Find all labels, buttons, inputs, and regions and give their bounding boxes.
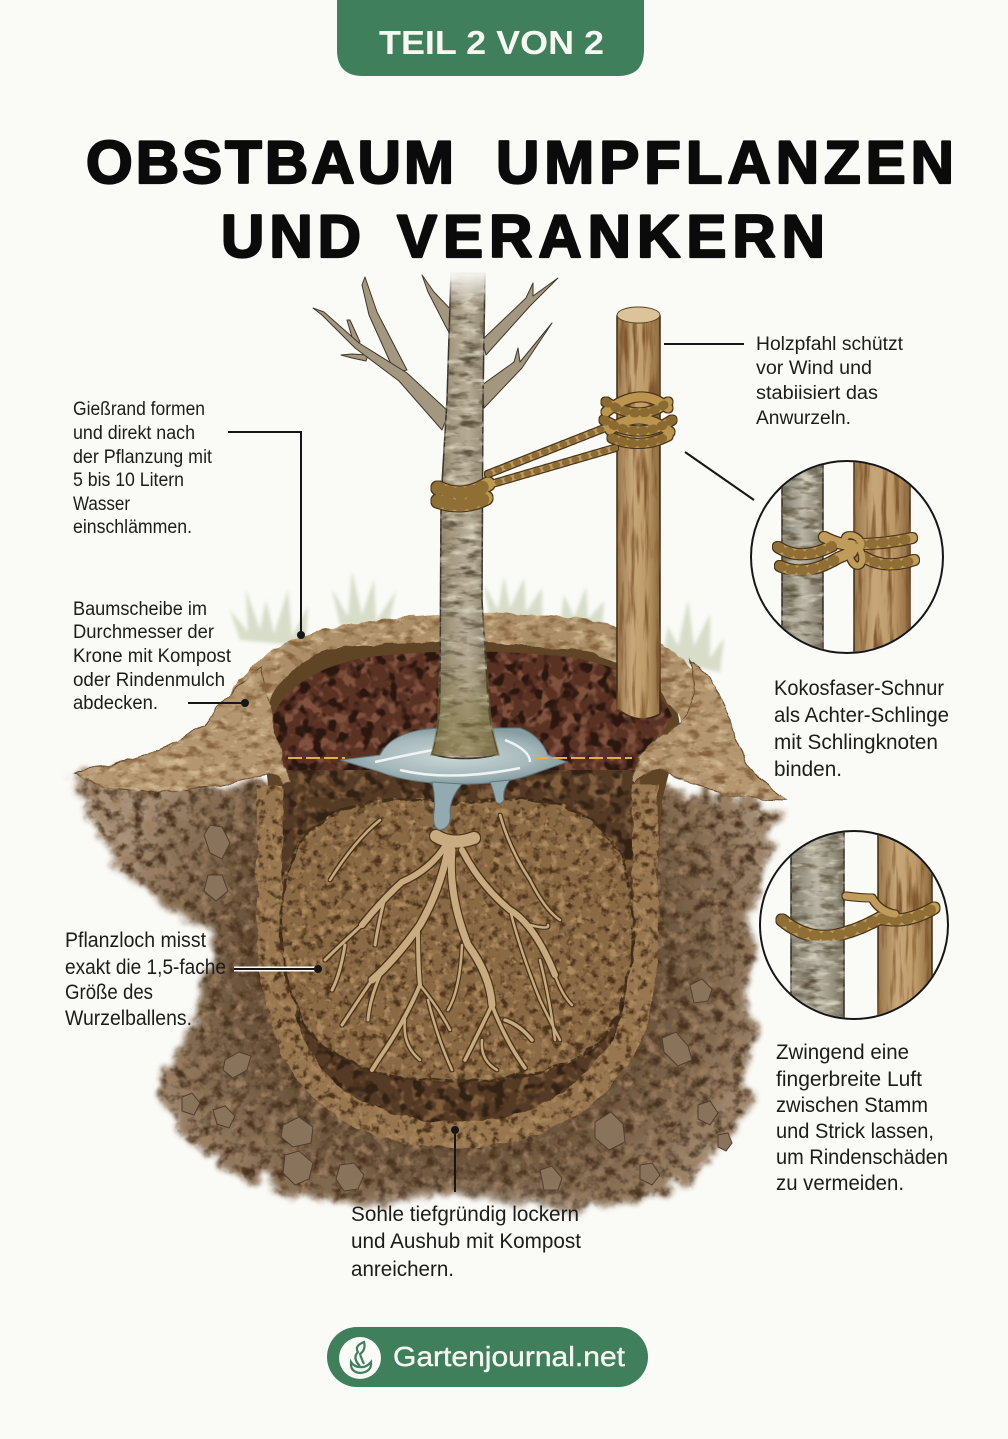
label: pit floor bbox=[351, 1203, 581, 1281]
right ground flap bbox=[632, 660, 786, 800]
label: mulch: Krone mit Kompost bbox=[73, 646, 232, 667]
leader: watering edge bbox=[228, 432, 305, 639]
icon: sprout in pot bbox=[339, 1337, 381, 1379]
label: planting hole: Wurzelballens. bbox=[65, 1007, 192, 1030]
root ball bbox=[281, 799, 633, 1081]
white glow behind labels bbox=[305, 1205, 625, 1285]
label: watering edge bbox=[73, 399, 213, 538]
label: knot bbox=[774, 677, 949, 781]
label: stake: Holzpfahl schützt bbox=[756, 334, 904, 355]
stones in the soil bbox=[182, 825, 732, 1191]
label: watering edge: 5 bis 10 Litern bbox=[73, 470, 184, 491]
label: watering edge: Gießrand formen bbox=[73, 399, 205, 420]
leader: stake bbox=[664, 343, 744, 345]
label: watering edge: einschlämmen. bbox=[73, 517, 192, 538]
leader: knot detail bbox=[685, 452, 754, 500]
water puddle bbox=[340, 728, 567, 830]
label: pit floor: und Aushub mit Kompost bbox=[351, 1230, 581, 1253]
label: watering edge: Wasser bbox=[73, 494, 131, 515]
label: knot: als Achter-Schlinge bbox=[774, 704, 949, 727]
label: mulch: oder Rindenmulch bbox=[73, 670, 225, 691]
label: knot: binden. bbox=[774, 758, 842, 781]
label: gap: zu vermeiden. bbox=[776, 1172, 904, 1195]
title: UMPFLANZEN bbox=[496, 129, 954, 196]
surrounding soil bbox=[72, 772, 782, 1209]
header tab bbox=[337, 0, 644, 76]
label: gap bbox=[776, 1041, 948, 1195]
label: planting hole: exakt die 1,5-fache bbox=[65, 956, 226, 979]
title: VERANKERN bbox=[397, 203, 825, 270]
label: mulch bbox=[73, 599, 232, 714]
soil level dashed line bbox=[288, 757, 632, 759]
label: mulch: Durchmesser der bbox=[73, 622, 215, 643]
label: planting hole: Größe des bbox=[65, 981, 153, 1004]
left ground flap bbox=[72, 668, 290, 792]
label: gap: fingerbreite Luft bbox=[776, 1068, 922, 1091]
pit lining bbox=[269, 785, 646, 1135]
wooden stake bbox=[617, 307, 660, 719]
tree trunk bbox=[430, 271, 500, 758]
label: knot: Kokosfaser-Schnur bbox=[774, 677, 944, 700]
label: pit floor: Sohle tiefgründig lockern bbox=[351, 1203, 579, 1226]
header tab: TEIL 2 VON 2 bbox=[379, 24, 604, 61]
roots bbox=[325, 815, 572, 1070]
leader: mulch bbox=[188, 699, 249, 707]
label: planting hole bbox=[65, 929, 226, 1030]
label: stake: vor Wind und bbox=[756, 358, 872, 379]
label: gap: zwischen Stamm bbox=[776, 1094, 928, 1117]
leader: pit floor bbox=[451, 1126, 459, 1192]
rope tie between trunk and stake bbox=[438, 397, 672, 505]
soil chunks around the ball bbox=[282, 770, 644, 1128]
label: stake: stabiisiert das bbox=[756, 383, 878, 404]
grass tufts bbox=[230, 571, 724, 672]
tree branches bbox=[313, 275, 558, 430]
title: OBSTBAUM bbox=[86, 129, 454, 196]
label: stake bbox=[756, 334, 904, 429]
footer badge: Gartenjournal.net bbox=[393, 1341, 625, 1372]
title: UND bbox=[221, 203, 361, 270]
footer badge bbox=[327, 1327, 648, 1387]
label: mulch: abdecken. bbox=[73, 693, 158, 714]
label: mulch: Baumscheibe im bbox=[73, 599, 207, 620]
detail circle: figure-eight knot bbox=[751, 455, 943, 660]
label: watering edge: der Pflanzung mit bbox=[73, 447, 213, 468]
label: gap: um Rindenschäden bbox=[776, 1146, 948, 1169]
mulch layer bbox=[270, 652, 672, 790]
title bbox=[86, 129, 954, 270]
detail circle: finger-wide gap bbox=[760, 825, 948, 1030]
label: gap: Zwingend eine bbox=[776, 1041, 909, 1064]
leader: planting hole bbox=[234, 965, 322, 973]
label: pit floor: anreichern. bbox=[351, 1258, 454, 1281]
label: knot: mit Schlingknoten bbox=[774, 731, 938, 754]
dark pit interior bbox=[262, 640, 680, 1125]
label: stake: Anwurzeln. bbox=[756, 408, 851, 429]
label: gap: und Strick lassen, bbox=[776, 1120, 934, 1143]
label: watering edge: und direkt nach bbox=[73, 423, 195, 444]
back rim of watering edge bbox=[212, 614, 722, 735]
label: planting hole: Pflanzloch misst bbox=[65, 929, 206, 952]
